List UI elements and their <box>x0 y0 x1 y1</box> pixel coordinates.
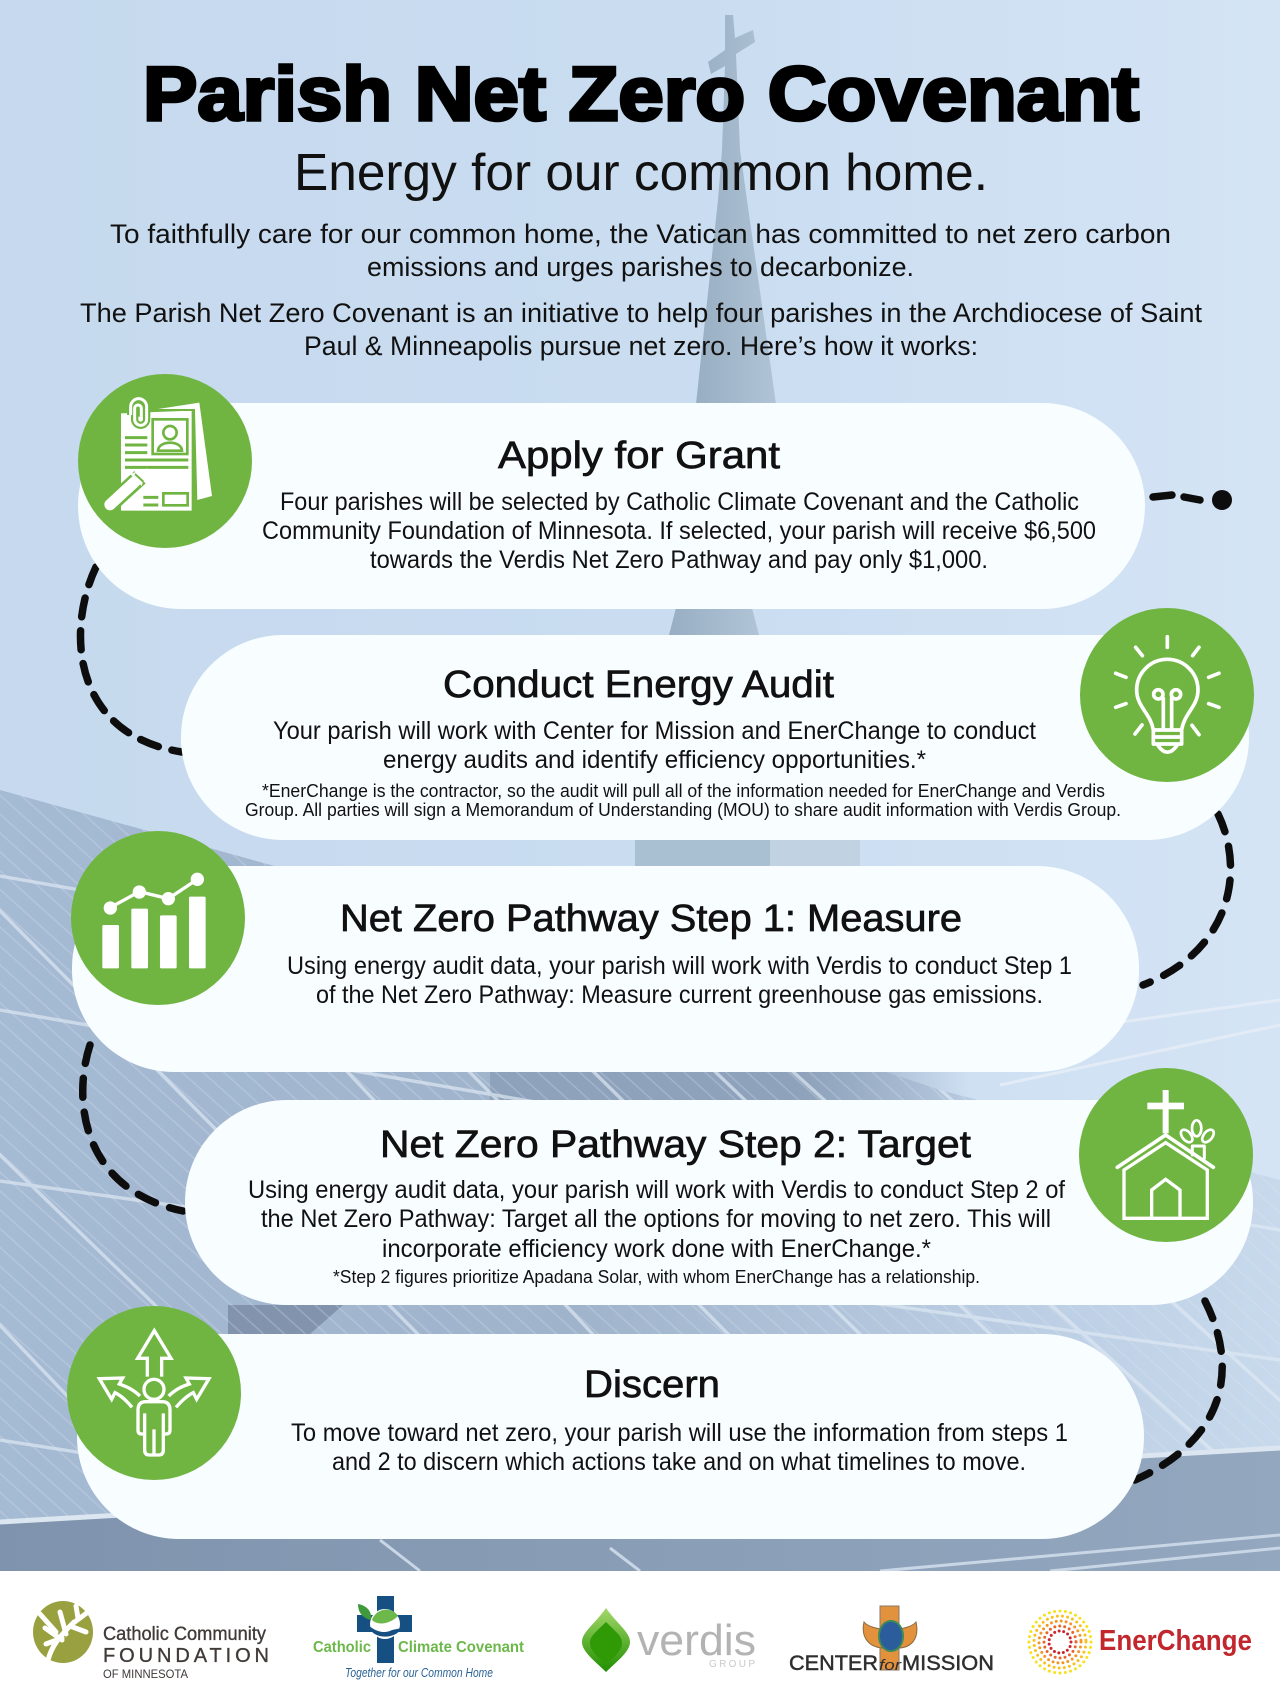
text: step 2 body <box>248 1176 1065 1263</box>
dashed connector: step 4 to step 5 <box>1135 1301 1222 1480</box>
text: step 2 body: Using energy audit data, your parish will work with Verdis to conduct Step 2 of <box>248 1176 1065 1204</box>
panel: apply for grant <box>78 403 1145 609</box>
panel: conduct energy audit <box>181 635 1249 840</box>
icon: application document <box>78 374 252 548</box>
footnote: energy audit <box>245 781 1121 820</box>
text: apply for grant body: towards the Verdis Net Zero Pathway and pay only $1,000. <box>370 546 988 574</box>
icon: bar chart with trend line <box>71 831 245 1005</box>
logo: Catholic Climate Covenant: Catholic <box>313 1639 371 1656</box>
text: energy audit body: Your parish will work with Center for Mission and EnerChange to conduct <box>273 717 1036 745</box>
logo: Verdis Group: GROUP <box>709 1659 755 1670</box>
logo: Catholic Climate Covenant <box>313 1596 525 1680</box>
intro paragraph 2: Paul & Minneapolis pursue net zero. Here’s how it works: <box>304 331 978 361</box>
text: discern body: To move toward net zero, your parish will use the information from steps 1 <box>291 1419 1068 1447</box>
intro paragraph 1 <box>110 219 1171 282</box>
text: apply for grant body <box>262 488 1096 574</box>
text: step 1 body <box>287 952 1072 1009</box>
intro paragraph 1: To faithfully care for our common home, the Vatican has committed to net zero carbon <box>110 219 1171 249</box>
footer: white logo strip <box>0 1571 1280 1707</box>
logo: Catholic Community Foundation of Minnesota: Catholic Community <box>103 1624 266 1645</box>
logo: Catholic Climate Covenant: Together for our Common Home <box>345 1665 493 1680</box>
icon: person with three arrows <box>67 1306 241 1480</box>
background: lower roof band <box>0 1448 1280 1571</box>
footnote: step 2: *Step 2 figures prioritize Apadana Solar, with whom EnerChange has a relationship. <box>333 1267 980 1287</box>
logo: Verdis Group <box>582 1608 756 1672</box>
dashed connector: step 1 to step 2 <box>80 567 182 752</box>
text: step 1 body: of the Net Zero Pathway: Measure current greenhouse gas emissions. <box>316 981 1043 1009</box>
heading: step 1 measure: Net Zero Pathway Step 1: Measure <box>340 898 962 940</box>
logo: EnerChange <box>1029 1611 1252 1673</box>
intro paragraph 2: The Parish Net Zero Covenant is an initiative to help four parishes in the Archdiocese of Saint <box>80 298 1203 328</box>
logo: Center for Mission <box>789 1606 994 1675</box>
dashed connector: step 1 to dot <box>1153 490 1232 510</box>
text: step 2 body: incorporate efficiency work done with EnerChange.* <box>382 1235 931 1263</box>
intro paragraph 1: emissions and urges parishes to decarbonize. <box>367 252 914 282</box>
intro paragraph 2 <box>80 298 1203 361</box>
icon: church with plant <box>1079 1068 1253 1242</box>
logo: EnerChange: EnerChange <box>1099 1625 1252 1657</box>
logo: Catholic Climate Covenant: Climate Covenant <box>398 1639 525 1656</box>
footnote: energy audit: Group. All parties will sign a Memorandum of Understanding (MOU) to share audit information with Verdis Group. <box>245 800 1121 820</box>
logo: Verdis Group: verdis <box>637 1616 756 1665</box>
heading: conduct energy audit: Conduct Energy Audit <box>443 664 834 706</box>
text: step 2 body: the Net Zero Pathway: Target all the options for moving to net zero. This will <box>261 1205 1051 1233</box>
background: solar panel roof <box>0 790 1280 1520</box>
text: discern body <box>291 1419 1068 1476</box>
text: step 1 body: Using energy audit data, your parish will work with Verdis to conduct Step 1 <box>287 952 1072 980</box>
text: apply for grant body: Community Foundation of Minnesota. If selected, your parish will receive $6,500 <box>262 517 1096 545</box>
logo: Catholic Community Foundation of Minnesota: OF MINNESOTA <box>103 1669 188 1681</box>
logo: Center for Mission: MISSION <box>902 1652 994 1675</box>
icon: light bulb <box>1080 608 1254 782</box>
background: church spire and cross <box>635 15 860 867</box>
text: energy audit body <box>273 717 1036 774</box>
subtitle: Energy for our common home. <box>294 144 988 202</box>
dashed connector: step 2 to step 3 <box>1143 814 1231 985</box>
panel: net zero pathway step 2 <box>185 1100 1253 1305</box>
logo: Catholic Community Foundation of Minnesota <box>33 1601 269 1681</box>
panel: net zero pathway step 1 <box>72 866 1139 1072</box>
footnote: energy audit: *EnerChange is the contractor, so the audit will pull all of the information needed for EnerChange and Verdis <box>262 781 1105 801</box>
logo: Center for Mission: for <box>879 1657 902 1674</box>
logo: Catholic Community Foundation of Minnesota: FOUNDATION <box>103 1645 269 1667</box>
title: Parish Net Zero Covenant <box>143 52 1139 137</box>
text: energy audit body: energy audits and identify efficiency opportunities.* <box>383 746 926 774</box>
text: discern body: and 2 to discern which actions take and on what timelines to move. <box>332 1448 1026 1476</box>
panel: discern <box>77 1334 1144 1539</box>
dashed connector: step 3 to step 4 <box>83 1045 183 1211</box>
text: apply for grant body: Four parishes will be selected by Catholic Climate Covenant and the Catholic <box>280 488 1079 516</box>
heading: discern: Discern <box>584 1364 720 1406</box>
heading: apply for grant: Apply for Grant <box>498 435 780 477</box>
logo: Center for Mission: CENTER <box>789 1652 878 1675</box>
heading: step 2 target: Net Zero Pathway Step 2: Target <box>380 1124 971 1166</box>
